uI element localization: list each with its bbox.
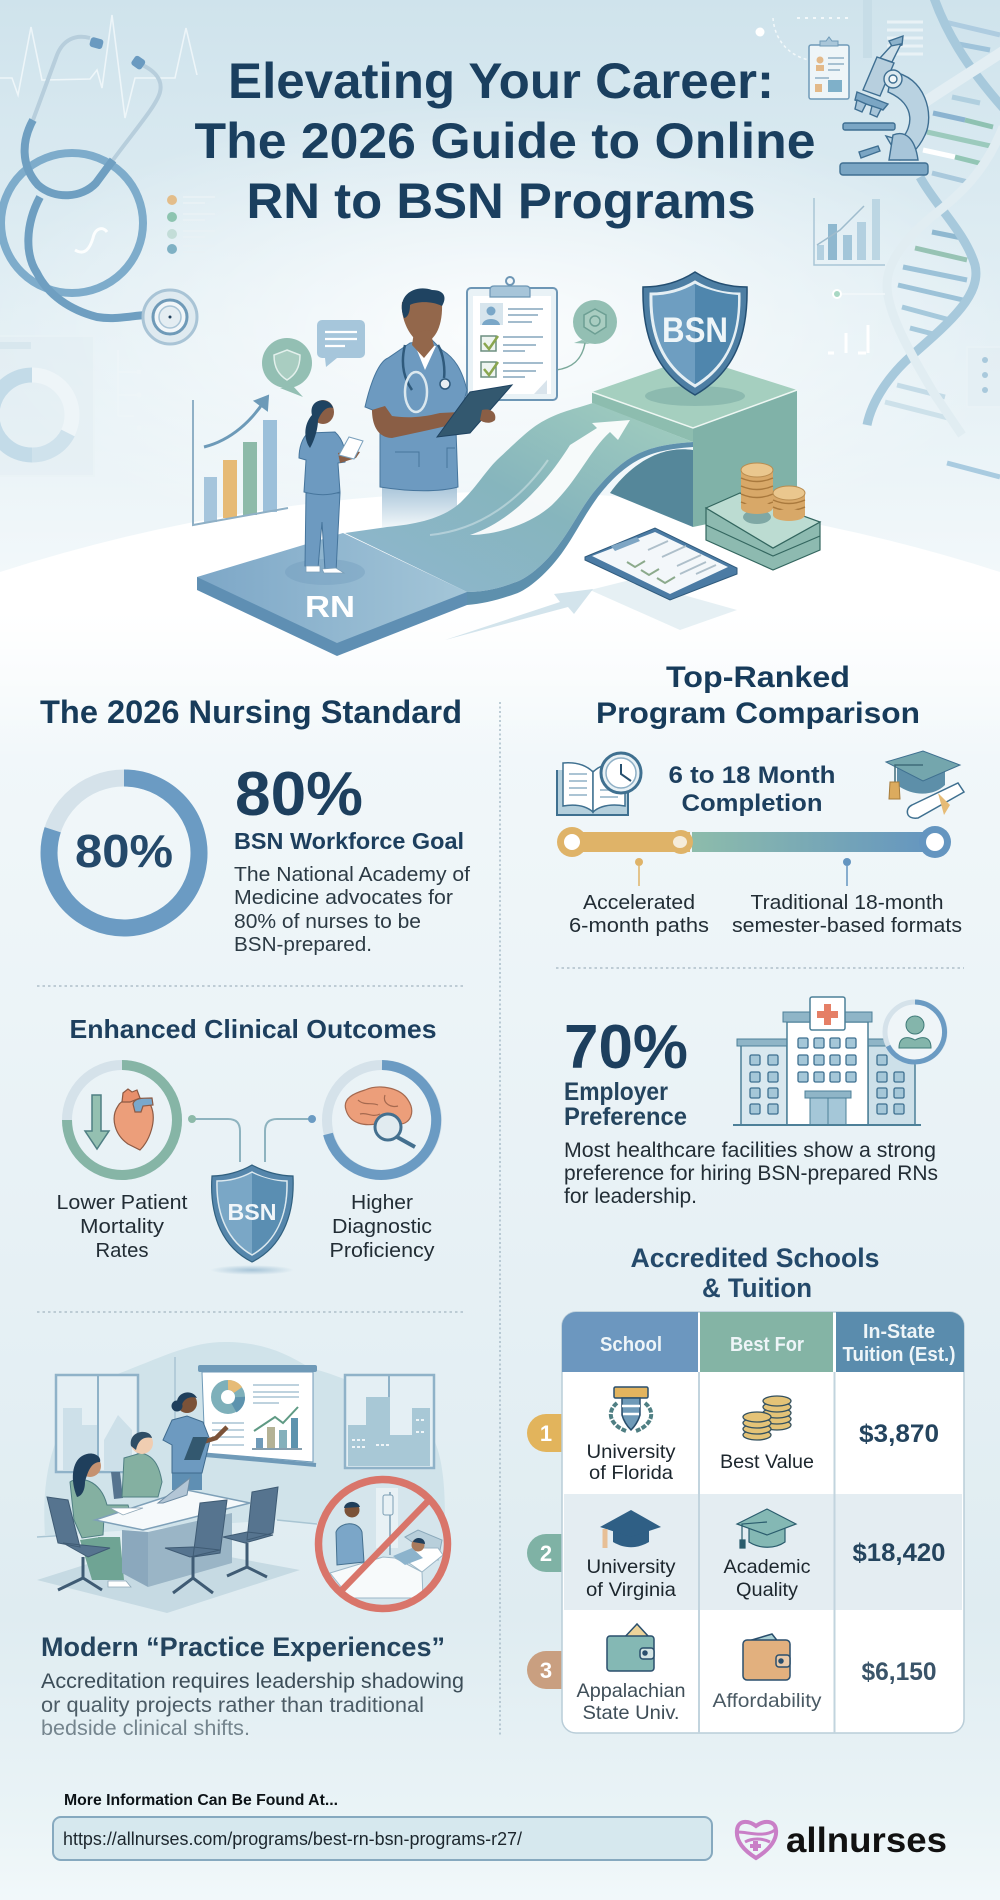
row: university of virginia: of Virginia [586, 1579, 676, 1601]
row: university of virginia: $18,420 [852, 1539, 946, 1567]
heading: Top-Ranked [666, 661, 850, 694]
illustration: classroom [37, 1342, 448, 1613]
heading: Modern “Practice Experiences” [41, 1632, 445, 1662]
icon: background bar chart [814, 198, 885, 265]
url box [53, 1817, 712, 1860]
label: higher diagnostic proficiency: Higher [351, 1192, 413, 1214]
icon: DNA helix [756, 0, 1000, 477]
hero illustration: RN to BSN pathway [193, 272, 820, 656]
icon: faded gauge panel [0, 336, 142, 476]
connector lines [188, 1115, 316, 1162]
icon: coins [743, 1396, 791, 1440]
BSN shield: BSN [228, 1199, 276, 1225]
row: university of virginia: University [586, 1556, 676, 1578]
icon: navy cap [600, 1510, 661, 1548]
url box: https://allnurses.com/programs/best-rn-bsn-programs-r27/ [63, 1829, 522, 1849]
seated nurses and chairs [47, 1432, 162, 1590]
icon: teal cap [737, 1509, 796, 1548]
row: university of virginia [586, 1509, 946, 1601]
table header: School [600, 1334, 662, 1356]
description: or quality projects rather than traditional [41, 1694, 424, 1717]
label: higher diagnostic proficiency [330, 1192, 434, 1262]
description: The National Academy of [234, 863, 470, 886]
stat label: BSN Workforce Goal [234, 828, 464, 854]
icon: teal wallet [607, 1624, 654, 1671]
row: university of virginia: Quality [736, 1579, 798, 1601]
title: Elevating Your Career: [228, 53, 774, 109]
stat label: Employer [564, 1078, 668, 1106]
row: appalachian state: Affordability [712, 1690, 822, 1712]
title: The 2026 Guide to Online [194, 113, 816, 169]
speech bubbles [262, 300, 617, 397]
meeting table [95, 1478, 250, 1587]
icon: ekg line [0, 15, 197, 118]
table [562, 1312, 964, 1733]
BSN shield [210, 1165, 294, 1275]
timeline label: traditional [732, 891, 962, 937]
icon: employee ring [885, 1002, 945, 1062]
donut chart 80% [49, 778, 199, 928]
row: appalachian state: Appalachian [576, 1680, 686, 1702]
heading: Accredited Schools [630, 1243, 880, 1273]
office chairs [165, 1487, 278, 1593]
completion label: Completion [682, 790, 822, 817]
label: lower patient mortality rates [56, 1192, 188, 1262]
rank tabs [527, 1414, 562, 1689]
icon: open book and clock [557, 753, 641, 815]
vertical divider [499, 702, 501, 1735]
row: university of florida: $3,870 [859, 1420, 939, 1448]
window right [345, 1375, 434, 1468]
panel: employer preference [564, 997, 945, 1208]
description [564, 1139, 938, 1208]
window left [56, 1375, 138, 1472]
description: Medicine advocates for [234, 886, 453, 909]
icon: tan wallet [743, 1634, 790, 1680]
flowing ramp [345, 403, 693, 605]
no bedside shifts sign [318, 1479, 448, 1609]
small nurse [285, 400, 365, 585]
description: for leadership. [564, 1185, 697, 1208]
heading: The 2026 Nursing Standard [40, 694, 462, 730]
footer heading: More Information Can Be Found At... [64, 1792, 338, 1809]
heading: Enhanced Clinical Outcomes [70, 1014, 436, 1044]
row: appalachian state: $6,150 [862, 1658, 936, 1686]
description: Most healthcare facilities show a strong [564, 1139, 936, 1162]
RN label: RN [305, 589, 355, 624]
row: university of virginia: Academic [724, 1556, 811, 1578]
projection screen with charts [198, 1365, 317, 1465]
stat label [564, 1078, 687, 1131]
heading: Program Comparison [596, 697, 920, 730]
panel: accredited schools and tuition [527, 1243, 964, 1733]
icon: top clipboard [809, 37, 849, 99]
completion label: 6 to 18 Month [668, 762, 836, 789]
timeline label: accelerated: Accelerated [583, 891, 695, 914]
icon: microscope [840, 36, 929, 175]
icon: hospital [733, 997, 921, 1125]
rank tabs: 1 [540, 1421, 552, 1446]
timeline label: traditional: Traditional 18-month [750, 891, 944, 914]
big clipboard [467, 277, 557, 400]
panel: enhanced clinical outcomes [56, 1014, 437, 1275]
panel: top-ranked program comparison [557, 661, 964, 937]
table header: Best For [730, 1334, 804, 1356]
timeline label: accelerated: 6-month paths [569, 914, 709, 937]
row: university of florida: University [586, 1441, 676, 1463]
label: lower patient mortality rates: Lower Patient [56, 1192, 188, 1214]
presenter [163, 1392, 227, 1490]
table header: In-State [863, 1321, 935, 1343]
platform RN [197, 533, 467, 656]
label: lower patient mortality rates: Rates [96, 1240, 148, 1262]
ring: diagnostic [327, 1065, 437, 1175]
timeline label: accelerated [569, 891, 709, 937]
row: appalachian state: State Univ. [582, 1702, 680, 1724]
rank tabs: 3 [540, 1658, 552, 1683]
title [194, 53, 816, 229]
table header [562, 1312, 964, 1372]
panel: modern practice experiences [37, 1342, 464, 1740]
green block pedestal [592, 357, 797, 527]
icon: stethoscope [1, 37, 197, 344]
icon: crest [611, 1387, 651, 1431]
decorative medical background [0, 0, 1000, 477]
label: higher diagnostic proficiency: Diagnostic [332, 1216, 432, 1238]
label: lower patient mortality rates: Mortality [80, 1216, 164, 1238]
timeline [557, 826, 951, 886]
money and coins [706, 463, 820, 570]
timeline label: traditional: semester-based formats [732, 914, 962, 937]
rank tabs: 2 [540, 1541, 552, 1566]
BSN shield: BSN [662, 311, 728, 350]
icon: brain with magnifier [345, 1087, 415, 1147]
stat 70%: 70% [564, 1013, 688, 1082]
stat label: Preference [564, 1103, 687, 1131]
heading: & Tuition [702, 1273, 812, 1303]
description: BSN-prepared. [234, 933, 372, 956]
description: 80% of nurses to be [234, 910, 421, 933]
icon: color legend [167, 195, 215, 254]
row: appalachian state [576, 1624, 936, 1724]
panel: the 2026 nursing standard [40, 694, 470, 956]
footer: more information [53, 1792, 947, 1860]
bar chart [193, 396, 288, 525]
stat 80%: 80% [235, 760, 363, 829]
description: bedside clinical shifts. [41, 1717, 250, 1740]
row: university of florida: Best Value [720, 1451, 814, 1473]
table header: Tuition (Est.) [842, 1344, 956, 1366]
flat clipboard [585, 528, 737, 630]
title: RN to BSN Programs [246, 173, 756, 229]
description [41, 1670, 464, 1740]
BSN shield [643, 272, 747, 395]
ring: lower mortality [67, 1065, 177, 1175]
row: university of florida [586, 1387, 939, 1484]
heading [630, 1243, 880, 1303]
description: Accreditation requires leadership shadowing [41, 1670, 464, 1693]
description [234, 863, 470, 956]
icon: heart [114, 1089, 153, 1150]
large nurse [365, 288, 512, 527]
completion label [668, 762, 836, 817]
description: preference for hiring BSN-prepared RNs [564, 1162, 938, 1185]
label: higher diagnostic proficiency: Proficiency [330, 1240, 434, 1262]
pale arrow under platform [445, 589, 593, 640]
icon: graduation cap and diploma [886, 751, 964, 818]
icon: down arrow [85, 1095, 109, 1149]
donut chart 80%: 80% [75, 825, 173, 877]
row: university of florida: of Florida [589, 1462, 673, 1484]
heading [596, 661, 920, 730]
logo: allnurses: allnurses [786, 1821, 947, 1860]
